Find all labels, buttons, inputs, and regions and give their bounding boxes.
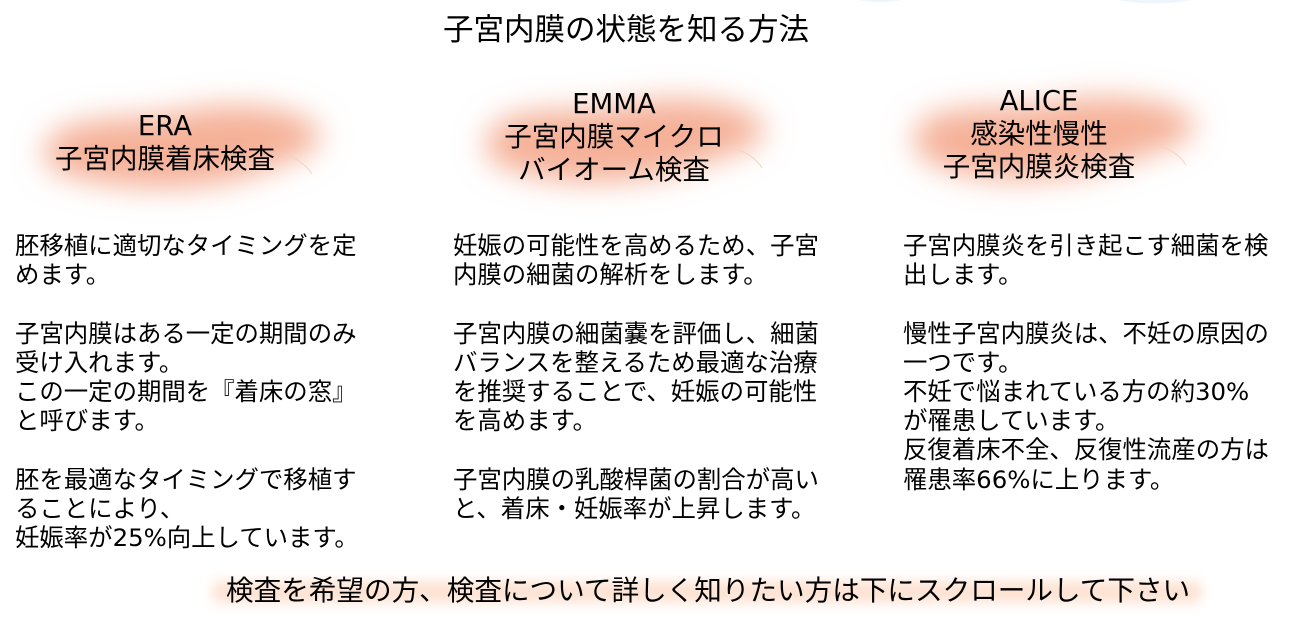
text block: EMMA description: 内膜の細菌の解析をします。 (453, 260, 768, 289)
text block: ALICE description: 反復着床不全、反復性流産の方は (903, 435, 1269, 464)
heading: EMMA: EMMA (572, 88, 656, 120)
text block: ALICE description: 罹患率66%に上ります。 (903, 465, 1174, 494)
heading: ERA (55, 110, 275, 175)
text block: ALICE description: 慢性子宮内膜炎は、不妊の原因の (903, 319, 1269, 348)
text block: ALICE description: 一つです。 (903, 348, 1023, 377)
decoration: pale blue arcs at top (858, 0, 1192, 4)
text block: EMMA description: 妊娠の可能性を高めるため、子宮 (453, 231, 819, 260)
text block: ERA description: この一定の期間を『着床の窓』 (15, 377, 356, 406)
text block: ALICE description: 不妊で悩まれている方の約30% (903, 377, 1249, 406)
text block: ERA description: と呼びます。 (15, 406, 159, 435)
blob: bottom scroll notice (212, 581, 1202, 603)
blob: ERA (43, 106, 320, 188)
text block: EMMA description: と、着床・妊娠率が上昇します。 (453, 494, 815, 523)
text block: ALICE description: が罹患しています。 (903, 406, 1119, 435)
heading: ALICE: 子宮内膜炎検査 (943, 151, 1135, 183)
heading: EMMA: 子宮内膜マイクロ (504, 121, 724, 153)
heading: ALICE (943, 85, 1135, 183)
heading: ALICE: 感染性慢性 (970, 118, 1108, 150)
text block: ALICE description: 出します。 (903, 260, 1023, 289)
text block: ERA description: ることにより、 (15, 494, 184, 523)
heading: EMMA: バイオーム検査 (518, 154, 710, 186)
text block: EMMA description: 子宮内膜の乳酸桿菌の割合が高い (453, 465, 819, 494)
text block: ERA description (15, 231, 359, 552)
text block: ERA description: 子宮内膜はある一定の期間のみ (15, 319, 356, 348)
text block: ERA description: 胚移植に適切なタイミングを定 (15, 231, 356, 260)
blob: ALICE (913, 98, 1194, 179)
text block: ALICE description (903, 231, 1269, 494)
text block: ERA description: 受け入れます。 (15, 348, 183, 377)
text block: ERA description: めます。 (15, 260, 110, 289)
heading: ERA: 子宮内膜着床検査 (55, 143, 275, 175)
text block: EMMA description: 子宮内膜の細菌嚢を評価し、細菌 (453, 319, 819, 348)
text block: EMMA description (453, 231, 819, 523)
heading: EMMA (504, 88, 724, 186)
callout: scroll notice: 検査を希望の方、検査について詳しく知りたい方は下にスクロールして下さい (226, 574, 1190, 607)
title: 子宮内膜の状態を知る方法 (443, 13, 809, 48)
text block: ALICE description: 子宮内膜炎を引き起こす細菌を検 (903, 231, 1268, 260)
heading: ERA: ERA (138, 110, 192, 142)
blob: EMMA (485, 99, 765, 182)
text block: EMMA description: を推奨することで、妊娠の可能性 (453, 377, 817, 406)
text block: EMMA description: バランスを整えるため最適な治療 (453, 348, 818, 377)
text block: ERA description: 妊娠率が25%向上しています。 (15, 523, 359, 552)
heading: ALICE: ALICE (1000, 85, 1078, 117)
text block: ERA description: 胚を最適なタイミングで移植す (15, 465, 356, 494)
text block: EMMA description: を高めます。 (453, 406, 597, 435)
